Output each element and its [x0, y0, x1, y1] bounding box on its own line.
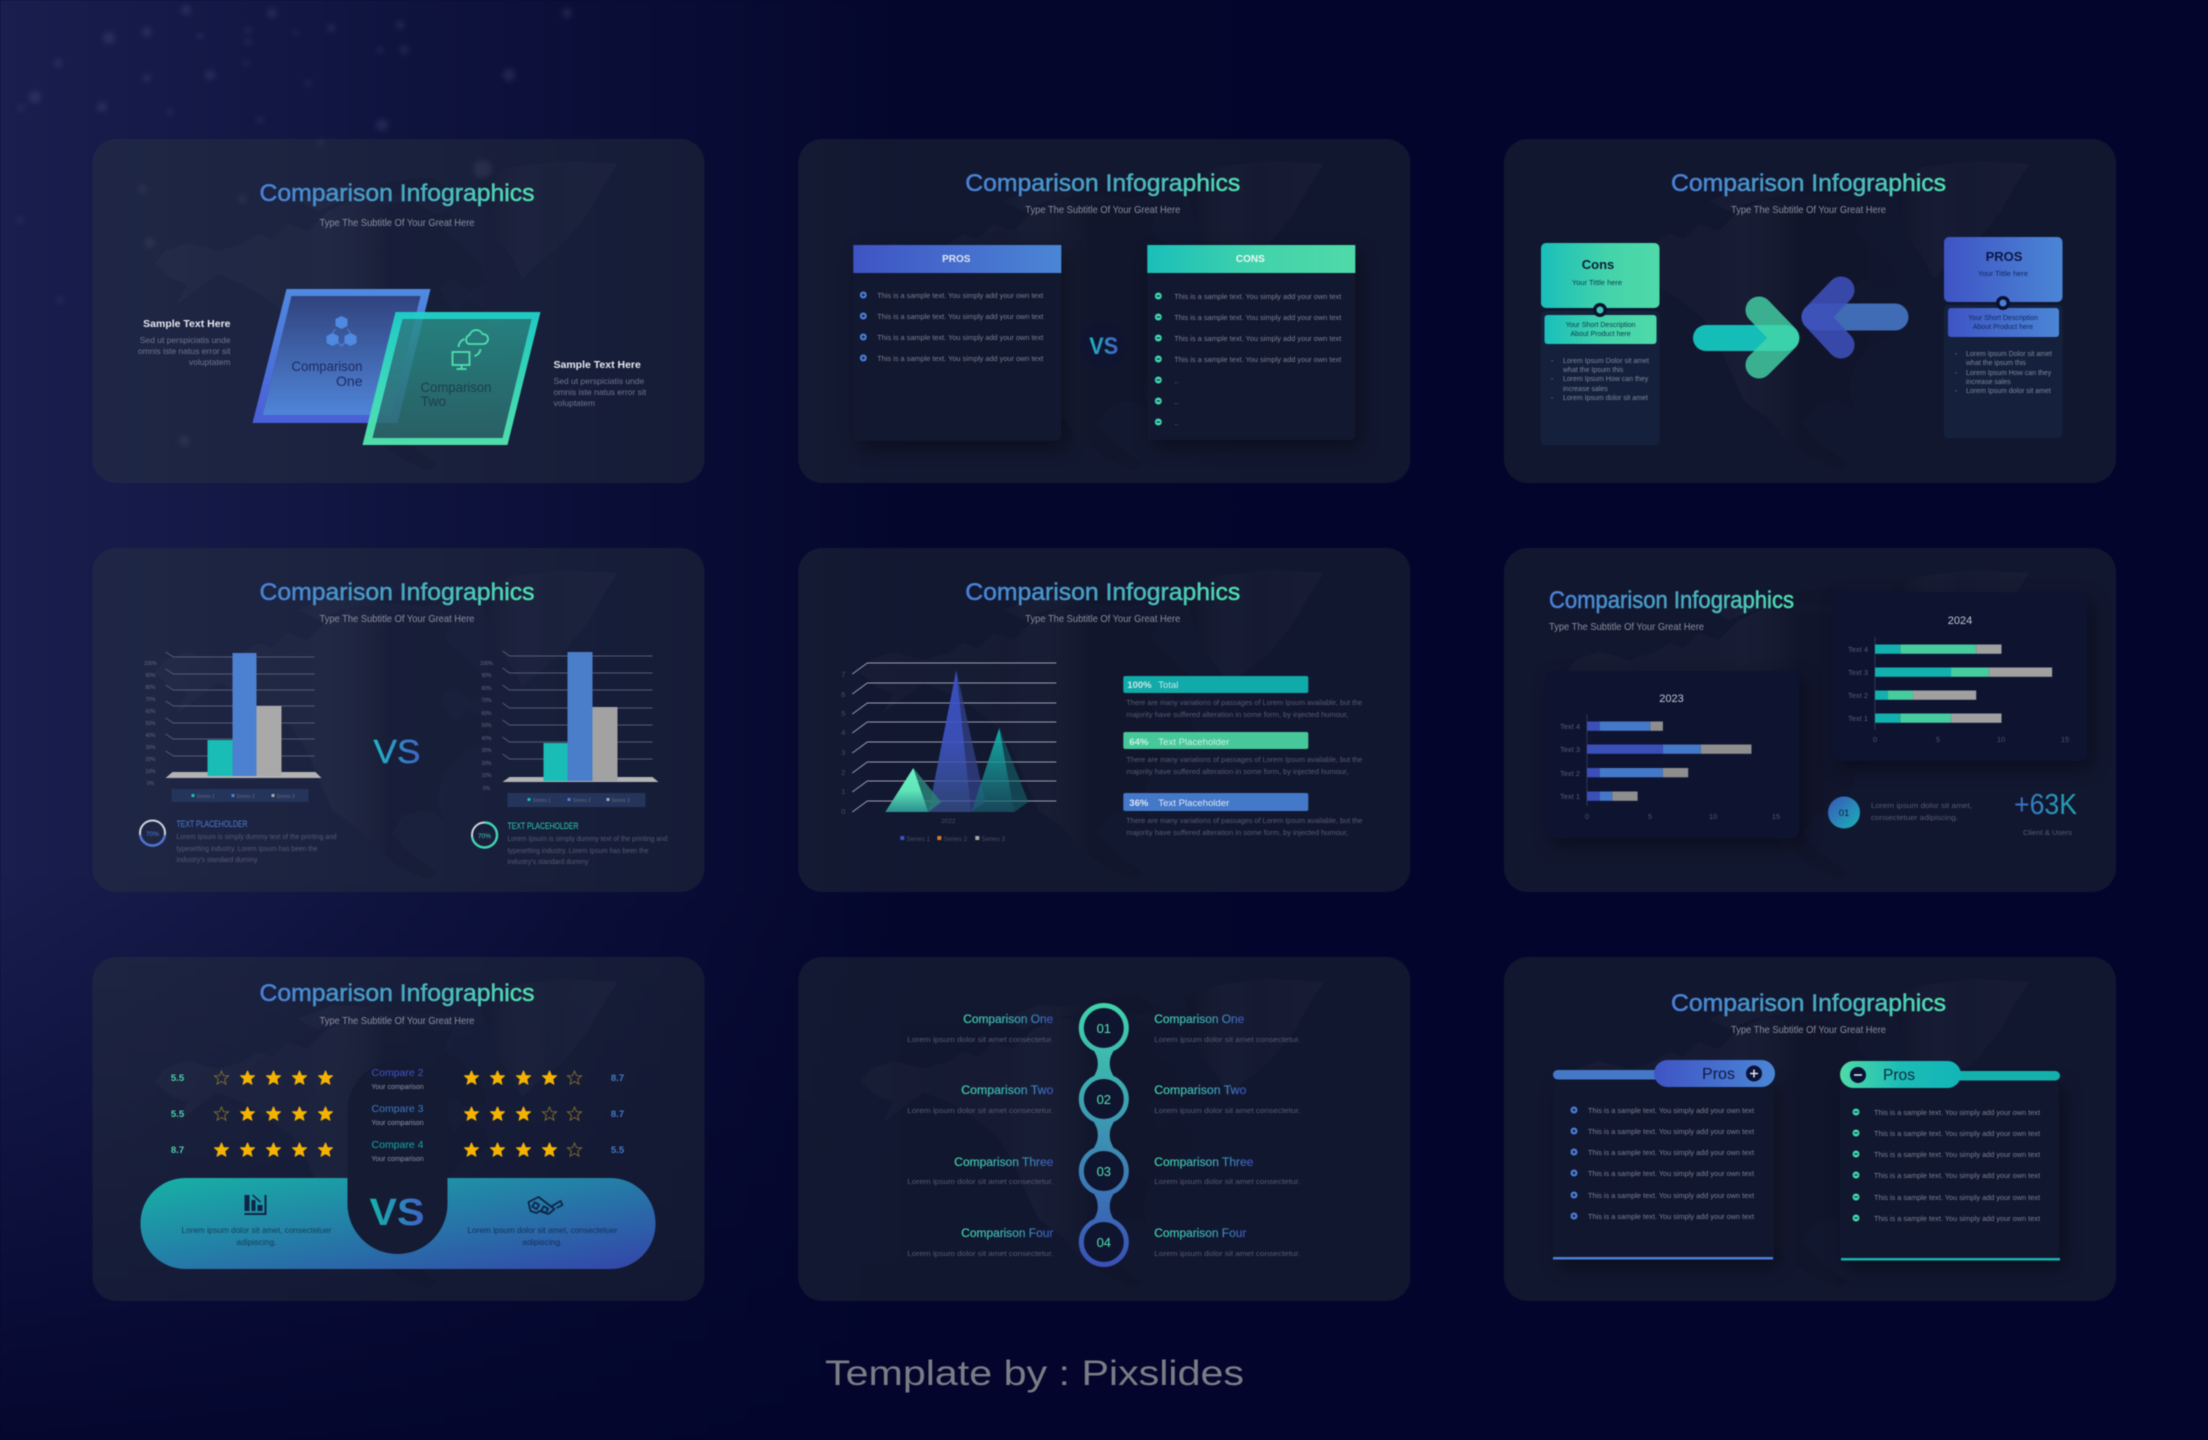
pros card right: Pros	[1883, 1067, 1915, 1084]
subtitle: Type The Subtitle Of Your Great Here	[1025, 613, 1180, 625]
right labels: Lorem ipsum dolor sit amet consectetur.	[1154, 1106, 1300, 1115]
pros card: what the ipsum this	[1965, 360, 2026, 367]
stat left	[140, 819, 336, 864]
rating row 2	[171, 1103, 624, 1127]
stat: +63K: Client & Users	[2023, 828, 2072, 837]
chart card 2023: 0	[1585, 812, 1589, 821]
stat bar: total	[1123, 676, 1362, 719]
bar chart right: 30%	[481, 748, 492, 754]
bar chart left: 0%	[147, 781, 155, 787]
text block right	[554, 359, 647, 408]
right labels: Comparison Two	[1154, 1085, 1246, 1097]
pros card right: This is a sample text. You simply add your own text	[1874, 1193, 2041, 1202]
panel: pros pills	[1504, 957, 2116, 1301]
chart card 2024: 15	[2061, 735, 2069, 744]
subtitle: Type The Subtitle Of Your Great Here	[1731, 1024, 1886, 1036]
stat bar: 64 percent: 64%	[1129, 737, 1149, 748]
card: comparison two: Two	[420, 393, 446, 409]
title: Comparison Infographics	[965, 170, 1240, 197]
pros card: -	[1955, 388, 1958, 395]
bar chart right: Series 1	[532, 798, 551, 804]
pros card: This is a sample text. You simply add your own text	[877, 354, 1044, 363]
text block left: omnis iste natus error sit	[138, 346, 231, 356]
right labels: Lorem ipsum dolor sit amet consectetur.	[1154, 1177, 1300, 1186]
bar chart right: 100%	[480, 661, 493, 667]
subtitle: Type The Subtitle Of Your Great Here	[320, 613, 475, 625]
pyramid chart: 5	[841, 709, 845, 718]
stat bar: 36 percent	[1123, 793, 1362, 837]
cons card: Your Short Description	[1566, 322, 1635, 329]
bar chart left: 90%	[145, 673, 156, 679]
badge 01	[1828, 796, 1860, 828]
cons card: This is a sample text. You simply add your own text	[1174, 292, 1342, 301]
chart card 2024: 0	[1873, 735, 1877, 744]
cons card: -	[1551, 358, 1554, 365]
pros card: -	[1955, 351, 1958, 358]
title: Comparison Infographics	[1671, 990, 1946, 1017]
cons card	[1541, 243, 1660, 445]
rating row 1: Compare 2	[372, 1067, 424, 1079]
left labels: Comparison One	[963, 1014, 1053, 1026]
cons card: This is a sample text. You simply add your own text	[1174, 334, 1342, 343]
pyramid chart: 4	[841, 728, 845, 737]
stat bar: 36 percent: 36%	[1129, 798, 1149, 809]
bar chart right	[480, 651, 658, 807]
bar chart left: 50%	[145, 721, 156, 727]
badge 01: 01	[1839, 808, 1849, 819]
bar chart right: 20%	[481, 761, 492, 767]
pros card	[1944, 237, 2062, 438]
vs label: VS	[374, 733, 420, 770]
panel: arrows comparison	[1504, 139, 2116, 483]
chart card 2024: Text 4	[1848, 645, 1868, 654]
bar chart right: 10%	[481, 773, 492, 779]
stat right: Lorem Ipsum is simply dummy text of the printing and	[508, 834, 668, 843]
cons card: ..	[1174, 397, 1178, 406]
bar chart right: 80%	[481, 686, 492, 692]
cons card: Lorem Ipsum Dolor sit amet	[1563, 358, 1649, 365]
subtitle: Type The Subtitle Of Your Great Here	[1549, 621, 1704, 633]
pyramid chart: 0	[841, 807, 845, 816]
badge text	[1871, 801, 1972, 822]
pros card: -	[1955, 370, 1958, 377]
rating row 2: 8.7	[611, 1109, 624, 1120]
bar chart left: 40%	[145, 733, 156, 739]
pros card left: This is a sample text. You simply add your own text	[1588, 1169, 1755, 1178]
subtitle: Type The Subtitle Of Your Great Here	[320, 1015, 475, 1027]
pros card left: This is a sample text. You simply add your own text	[1588, 1212, 1755, 1221]
stat bar: total: majority have suffered alteration in some form, by injected humour,	[1126, 710, 1348, 719]
chain of numbers: 03	[1097, 1164, 1111, 1179]
icon: 3d glasses	[528, 1197, 562, 1214]
left labels: Lorem ipsum dolor sit amet consectetur.	[907, 1035, 1053, 1044]
pros card left: This is a sample text. You simply add your own text	[1588, 1127, 1755, 1136]
bar chart left: Series 1	[196, 794, 215, 800]
stat left: 70%	[146, 831, 159, 838]
center pill	[348, 1061, 448, 1254]
pros card right: This is a sample text. You simply add your own text	[1874, 1129, 2041, 1138]
band text left	[182, 1225, 332, 1247]
pyramid chart: 3	[841, 748, 845, 757]
cons card: This is a sample text. You simply add your own text	[1174, 313, 1342, 322]
right labels: Lorem ipsum dolor sit amet consectetur.	[1154, 1249, 1300, 1258]
pyramid chart: 1	[841, 787, 845, 796]
stat left: typesetting industry. Lorem Ipsum has been the	[176, 844, 318, 853]
card: comparison two	[362, 312, 540, 445]
bar chart right: 70%	[481, 698, 492, 704]
bar chart right: 90%	[481, 673, 492, 679]
title: Comparison Infographics	[260, 980, 534, 1007]
bar chart left	[144, 652, 322, 802]
stat bar: 36 percent: majority have suffered alteration in some form, by injected humour,	[1126, 828, 1348, 837]
stat bar: 64 percent: Text Placeholder	[1158, 737, 1229, 748]
cons card: -	[1551, 376, 1554, 383]
band text right: Lorem ipsum dolor sit amet, consectetuer	[468, 1225, 618, 1235]
stat bar: 64 percent: majority have suffered alteration in some form, by injected humour,	[1126, 767, 1348, 776]
pros card: Lorem Ipsum dolor sit amet	[1966, 388, 2051, 395]
panel: star rating comparison	[92, 957, 704, 1301]
bar chart left: 80%	[145, 685, 156, 691]
pros card: Lorem Ipsum How can they	[1966, 370, 2052, 377]
rating row 2: Compare 3	[372, 1103, 424, 1115]
right labels: Lorem ipsum dolor sit amet consectetur.	[1154, 1035, 1300, 1044]
rating row 1	[171, 1067, 624, 1091]
chart card 2023: Text 1	[1560, 792, 1580, 801]
pyramid chart: 2022	[941, 818, 956, 825]
pyramid chart: Series 2	[943, 836, 968, 843]
cons card: Lorem Ipsum How can they	[1563, 376, 1649, 383]
stat bar: 64 percent	[1123, 732, 1362, 776]
panel: 3D bar charts	[92, 548, 704, 892]
pros card: increase sales	[1966, 379, 2011, 386]
chart card 2024: 2024	[1948, 615, 1972, 627]
pros card: Your Short Description	[1968, 315, 2038, 322]
bar chart right: Series 3	[612, 798, 630, 804]
left labels: Comparison Three	[954, 1157, 1053, 1169]
pros card right: This is a sample text. You simply add your own text	[1874, 1171, 2041, 1180]
left labels	[907, 1014, 1053, 1258]
pros card: PROS	[1986, 249, 2023, 264]
pros card: Lorem Ipsum Dolor sit amet	[1966, 351, 2052, 358]
subtitle: Type The Subtitle Of Your Great Here	[320, 217, 475, 229]
left labels: Comparison Two	[961, 1085, 1053, 1097]
stat: +63K: +63K	[2014, 789, 2078, 821]
vs badge: VS	[1089, 333, 1118, 360]
cons card	[1147, 245, 1355, 440]
chain of numbers: 01	[1097, 1021, 1111, 1036]
gradient band	[140, 1178, 656, 1269]
pros card left: This is a sample text. You simply add your own text	[1588, 1148, 1755, 1157]
pros card right: This is a sample text. You simply add your own text	[1874, 1150, 2041, 1159]
cons card: This is a sample text. You simply add your own text	[1174, 355, 1342, 364]
rating row 3: 5.5	[611, 1145, 625, 1156]
stat left: Lorem Ipsum is simply dummy text of the printing and	[176, 832, 336, 841]
left labels: Comparison Four	[961, 1228, 1053, 1240]
text block left: Sample Text Here	[143, 318, 231, 330]
rating row 1: 5.5	[171, 1073, 185, 1084]
stat bar: 36 percent: Text Placeholder	[1158, 798, 1229, 809]
bar chart right: 50%	[481, 723, 492, 729]
card: comparison one	[252, 289, 430, 423]
pyramid chart: 6	[841, 690, 845, 699]
bar chart right: 40%	[481, 736, 492, 742]
rating row 2: 5.5	[171, 1109, 185, 1120]
subtitle: Type The Subtitle Of Your Great Here	[1025, 204, 1180, 216]
title: Comparison Infographics	[1549, 587, 1794, 614]
vs label: VS	[370, 1192, 424, 1234]
stat bar: 36 percent: There are many variations of passages of Lorem Ipsum available, but the	[1126, 816, 1362, 825]
pros card left: This is a sample text. You simply add your own text	[1588, 1191, 1755, 1200]
pros card: PROS	[942, 254, 971, 265]
rating row 2: Your comparison	[371, 1120, 424, 1127]
card: comparison two: Comparison	[420, 379, 492, 395]
chart card 2024	[1833, 592, 2087, 761]
text block right: Sed ut perspiciatis unde	[554, 376, 644, 386]
badge text: consectetuer adipiscing.	[1871, 813, 1958, 822]
band text right	[468, 1225, 618, 1247]
stat bar: 64 percent: There are many variations of passages of Lorem Ipsum available, but the	[1126, 755, 1362, 764]
bar chart left: 30%	[145, 745, 156, 751]
rating row 1: Your comparison	[371, 1084, 424, 1091]
pros card: This is a sample text. You simply add your own text	[877, 312, 1044, 321]
stat right: 70%	[478, 833, 491, 840]
cons card: ..	[1174, 418, 1178, 427]
stat left: industry's standard dummy	[176, 855, 258, 864]
bar chart left: 60%	[145, 709, 156, 715]
bar chart left: Series 3	[276, 794, 295, 800]
pyramid chart: 7	[841, 670, 845, 679]
text block right: Sample Text Here	[554, 359, 641, 371]
chain of numbers: 02	[1097, 1092, 1111, 1107]
stat bar: total: There are many variations of passages of Lorem Ipsum available, but the	[1126, 698, 1362, 707]
pyramid chart: Series 1	[906, 836, 931, 843]
bar chart left: 100%	[144, 661, 157, 667]
pyramid chart: 2	[841, 768, 845, 777]
bar chart left: 10%	[145, 769, 156, 775]
bar chart right: 60%	[481, 711, 492, 717]
panel: pyramid chart	[798, 548, 1410, 892]
chart card 2023: 2023	[1659, 693, 1684, 705]
bar chart right: Series 2	[572, 798, 591, 804]
chart card 2024: Text 3	[1848, 668, 1868, 677]
title: Comparison Infographics	[260, 180, 534, 207]
icon: bar chart	[244, 1195, 266, 1215]
bar chart right: 0%	[483, 786, 491, 792]
cons card: -	[1551, 395, 1554, 402]
chart card 2023: 10	[1709, 812, 1717, 821]
cons card: About Product here	[1570, 331, 1631, 338]
pros card: About Product here	[1973, 324, 2033, 331]
chain of numbers: 04	[1097, 1235, 1111, 1250]
rating row 3: Your comparison	[371, 1156, 424, 1163]
stat bar: total: Total	[1158, 680, 1178, 691]
rating row 1: 8.7	[611, 1073, 624, 1084]
chart card 2023	[1545, 671, 1799, 838]
cons card: what the Ipsum this	[1562, 367, 1624, 374]
right labels: Comparison Three	[1154, 1157, 1253, 1169]
cons card: Lorem Ipsum dolor sit amet	[1563, 395, 1648, 402]
chain of numbers	[1081, 1006, 1126, 1264]
arrow: green right	[1706, 310, 1786, 365]
pyramid chart	[841, 663, 1056, 843]
pros card left	[1553, 1060, 1775, 1260]
title: Comparison Infographics	[1671, 170, 1946, 197]
panel: pros and cons table	[798, 139, 1410, 483]
arrow: blue left	[1815, 290, 1895, 345]
chart card 2023: 5	[1648, 812, 1652, 821]
card: comparison one: One	[336, 373, 363, 389]
cons card: ..	[1174, 376, 1178, 385]
chart card 2024: Text 1	[1848, 714, 1868, 723]
left labels: Lorem ipsum dolor sit amet consectetur.	[907, 1177, 1053, 1186]
band text left: adipiscing.	[236, 1237, 277, 1247]
text block right: voluptatem	[554, 398, 595, 408]
pros card left: This is a sample text. You simply add your own text	[1588, 1106, 1755, 1115]
pros card left: Pros	[1702, 1066, 1735, 1083]
rating row 3: Compare 4	[372, 1139, 424, 1151]
pros card	[853, 245, 1061, 441]
left labels: Lorem ipsum dolor sit amet consectetur.	[907, 1106, 1053, 1115]
right labels	[1154, 1014, 1300, 1258]
chart card 2024: Text 2	[1848, 691, 1868, 700]
stat left: TEXT PLACEHOLDER	[176, 819, 248, 829]
stat right: TEXT PLACEHOLDER	[508, 821, 579, 831]
chart card 2023: Text 4	[1560, 722, 1580, 731]
left labels: Lorem ipsum dolor sit amet consectetur.	[907, 1249, 1053, 1258]
cons card: Your Tittle here	[1572, 278, 1622, 287]
chart card 2023: Text 2	[1560, 769, 1580, 778]
text block left	[138, 318, 231, 367]
band text left: Lorem ipsum dolor sit amet, consectetuer	[182, 1225, 332, 1235]
panel: parallelogram comparison	[92, 139, 704, 483]
pros card right	[1840, 1061, 2060, 1260]
panel: stacked bar charts	[1504, 548, 2116, 892]
pros card: Your Tittle here	[1978, 269, 2028, 278]
title: Comparison Infographics	[260, 579, 534, 606]
panel: numbered chain	[798, 957, 1410, 1301]
chart card 2024: 10	[1997, 735, 2005, 744]
right labels: Comparison One	[1154, 1014, 1244, 1026]
pyramid chart: Series 3	[981, 836, 1006, 843]
bar chart left: Series 2	[236, 794, 255, 800]
stat right	[472, 821, 668, 866]
chart card 2024: 5	[1936, 735, 1940, 744]
footer credit: Template by : Pixslides	[825, 1354, 1244, 1393]
rating row 3	[171, 1139, 625, 1163]
text block right: omnis iste natus error sit	[554, 387, 647, 397]
stat: +63K	[2014, 789, 2078, 837]
pros card right: This is a sample text. You simply add your own text	[1874, 1214, 2041, 1223]
rating row 3: 8.7	[171, 1145, 184, 1156]
cons card: Cons	[1582, 257, 1614, 272]
pros card: This is a sample text. You simply add your own text	[877, 291, 1044, 300]
stat right: industry's standard dummy	[508, 857, 589, 866]
pros card: This is a sample text. You simply add your own text	[877, 333, 1044, 342]
right labels: Comparison Four	[1154, 1228, 1246, 1240]
text block left: Sed ut perspiciatis unde	[140, 335, 231, 345]
text block left: voluptatem	[189, 357, 230, 367]
card: comparison one: Comparison	[292, 358, 362, 374]
cons card: CONS	[1236, 254, 1265, 265]
pros card right: This is a sample text. You simply add your own text	[1874, 1108, 2041, 1117]
vs badge	[1080, 322, 1126, 368]
bar chart left: 20%	[145, 757, 156, 763]
chart card 2023: Text 3	[1560, 745, 1580, 754]
bar chart left: 70%	[145, 697, 156, 703]
title: Comparison Infographics	[965, 579, 1240, 606]
band text right: adipiscing.	[522, 1237, 563, 1247]
subtitle: Type The Subtitle Of Your Great Here	[1731, 204, 1886, 216]
cons card: increase sales	[1563, 386, 1608, 393]
chart card 2023: 15	[1772, 812, 1780, 821]
stat bar: total: 100%	[1127, 680, 1152, 691]
badge text: Lorem ipsum dolor sit amet,	[1871, 801, 1972, 810]
stat right: typesetting industry. Lorem Ipsum has been the	[508, 846, 648, 855]
